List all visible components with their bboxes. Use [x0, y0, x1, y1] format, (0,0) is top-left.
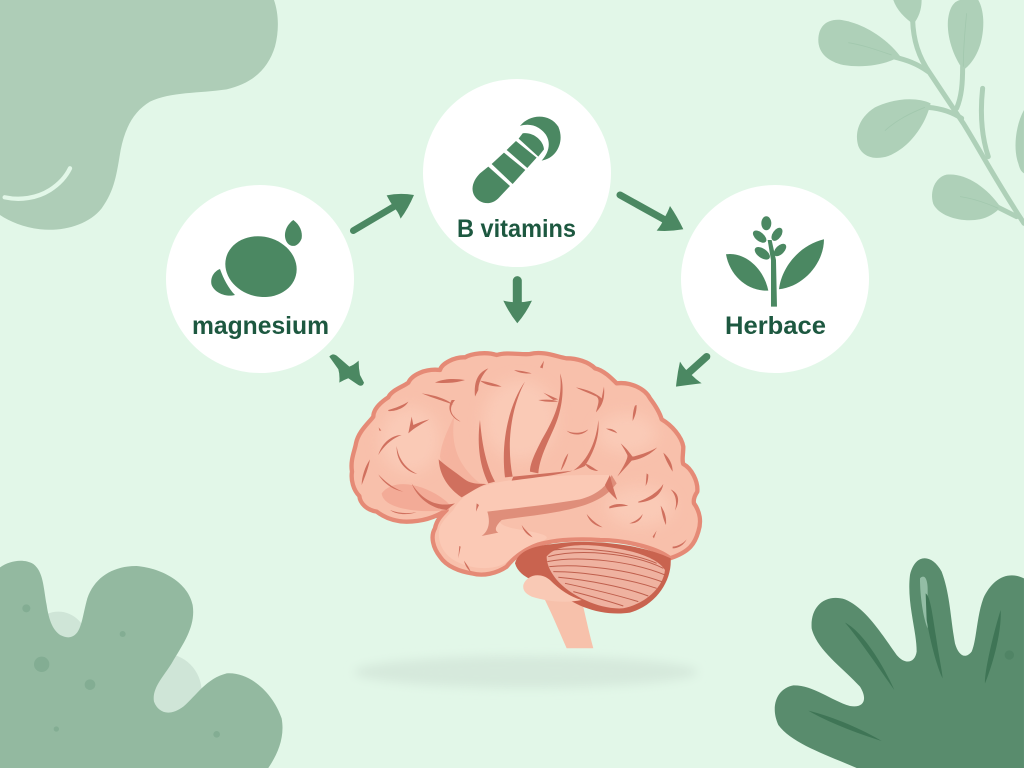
- blob: bottom-right decoration: [775, 558, 1024, 768]
- temporal lobe: [439, 475, 614, 568]
- circle: magnesium: [166, 185, 354, 373]
- cerebrum: [352, 353, 700, 575]
- grooves: [362, 361, 687, 572]
- arrow: magnesium to B vitamins: [353, 194, 414, 231]
- illustration: brain: [352, 353, 700, 648]
- branch: top-right leaves: [818, 0, 1024, 223]
- cerebellum: [515, 542, 671, 614]
- temporal groove: [482, 475, 617, 536]
- label: B vitamins: B vitamins: [457, 215, 576, 243]
- icon: capsule: [473, 117, 561, 203]
- arrow: B vitamins to Herbace: [620, 195, 683, 231]
- brain stem: [543, 597, 593, 648]
- arrow: Herbace to brain: [676, 357, 707, 387]
- blob: top-left decoration: [0, 0, 278, 230]
- arrow: B vitamins to brain: [503, 281, 532, 323]
- ground shadow: [354, 656, 698, 688]
- icon: magnesium: [211, 220, 303, 304]
- blob: bottom-left decoration: [0, 561, 283, 768]
- icon: herb sprig: [726, 216, 824, 307]
- circle: B vitamins: [423, 79, 611, 267]
- arrow: brain to magnesium: [329, 354, 364, 386]
- cerebrum soft highlights: [380, 380, 673, 527]
- label: magnesium: magnesium: [192, 312, 329, 340]
- label: Herbace: Herbace: [725, 312, 826, 340]
- circle: Herbace: [681, 185, 869, 373]
